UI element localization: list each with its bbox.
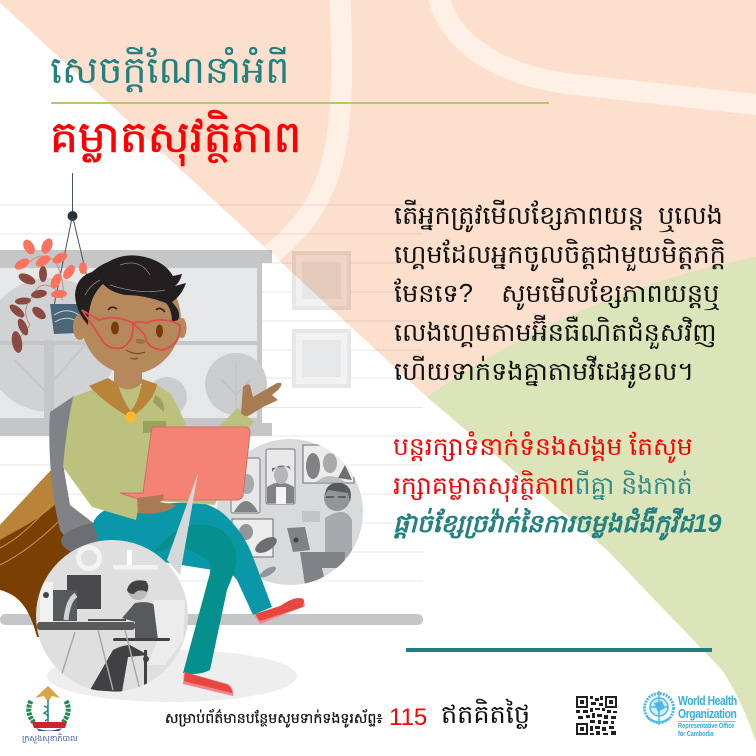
peach and light curved bands background — [0, 0, 756, 397]
hanging plant — [8, 173, 90, 354]
safety message: ផ្តាច់ខ្សែច្រវ៉ាក់នៃការចម្លងជំងឺកូវីដ19 — [393, 510, 721, 538]
footer hotline text: សម្រាប់ព័ត៌មានបន្ថែមសូមទាក់ទងទូរស័ព្ទ៖ — [165, 711, 383, 727]
safety message: រក្សាគម្លាតសុវត្ថិភាពពីគ្នា និងកាត់ — [393, 472, 693, 500]
head — [73, 255, 186, 374]
thought bubble tail — [167, 473, 198, 575]
hotline number: 115 — [389, 704, 427, 731]
free of charge text: ឥតគិតថ្លៃ — [441, 701, 530, 729]
QR code — [576, 696, 617, 735]
chair — [49, 396, 209, 563]
WHO wordmark — [678, 694, 737, 738]
body paragraph: តើអ្នកត្រូវមើលខ្សែភាពយន្ត ឬលេង — [394, 202, 723, 230]
home gamer bubble — [36, 540, 188, 695]
picture frames — [292, 251, 351, 388]
safety message — [393, 431, 722, 540]
far shoe — [255, 598, 305, 624]
window with trees — [0, 250, 272, 436]
scarf — [89, 378, 157, 418]
ministry of health emblem — [29, 686, 68, 731]
floor bar — [0, 614, 423, 625]
man — [63, 255, 305, 696]
wall stripes — [0, 205, 423, 581]
WHO wordmark: Representative Office — [678, 723, 734, 730]
green background shape — [427, 257, 756, 742]
neck — [114, 365, 142, 390]
body paragraph: ហ្គេមដែលអ្នកចូលចិត្តជាមួយមិត្តភក្តិ — [394, 241, 726, 269]
title line 2: គម្លាតសុវត្ថិភាព — [50, 113, 301, 162]
WHO wordmark: World Health — [678, 694, 737, 708]
near leg — [153, 525, 236, 674]
body paragraph: លេងហ្គេមតាមអ៊ីនធឺណិតជំនួសវិញ — [394, 319, 716, 347]
WHO wordmark: Organization — [678, 706, 736, 720]
title rule — [51, 102, 549, 104]
shirt — [63, 385, 254, 520]
video call bubble — [217, 439, 363, 585]
body paragraph — [394, 200, 726, 388]
footer rule — [406, 648, 712, 652]
lower hand — [137, 494, 176, 514]
WHO wordmark: for Cambodia — [678, 731, 713, 738]
body paragraph: ហើយទាក់ទងគ្នាតាមវីដេអូខល។ — [394, 358, 694, 386]
medallion — [126, 412, 136, 422]
raised hand — [241, 383, 282, 416]
ministry name: ក្រសួងសុខាភិបាល — [22, 734, 78, 743]
laptop — [120, 427, 250, 500]
brown curtain — [0, 468, 180, 640]
safety message: បន្តរក្សាទំនាក់ទំនងសង្គម តែសូម — [393, 433, 693, 461]
WHO globe emblem — [644, 691, 674, 725]
near shoe — [183, 672, 233, 696]
title line 1: សេចក្តីណែនាំអំពី — [50, 50, 289, 92]
body paragraph: មែនទេ? សូមមើលខ្សែភាពយន្តឬ — [394, 280, 719, 308]
floor shadow — [47, 650, 297, 702]
far leg — [93, 502, 272, 615]
